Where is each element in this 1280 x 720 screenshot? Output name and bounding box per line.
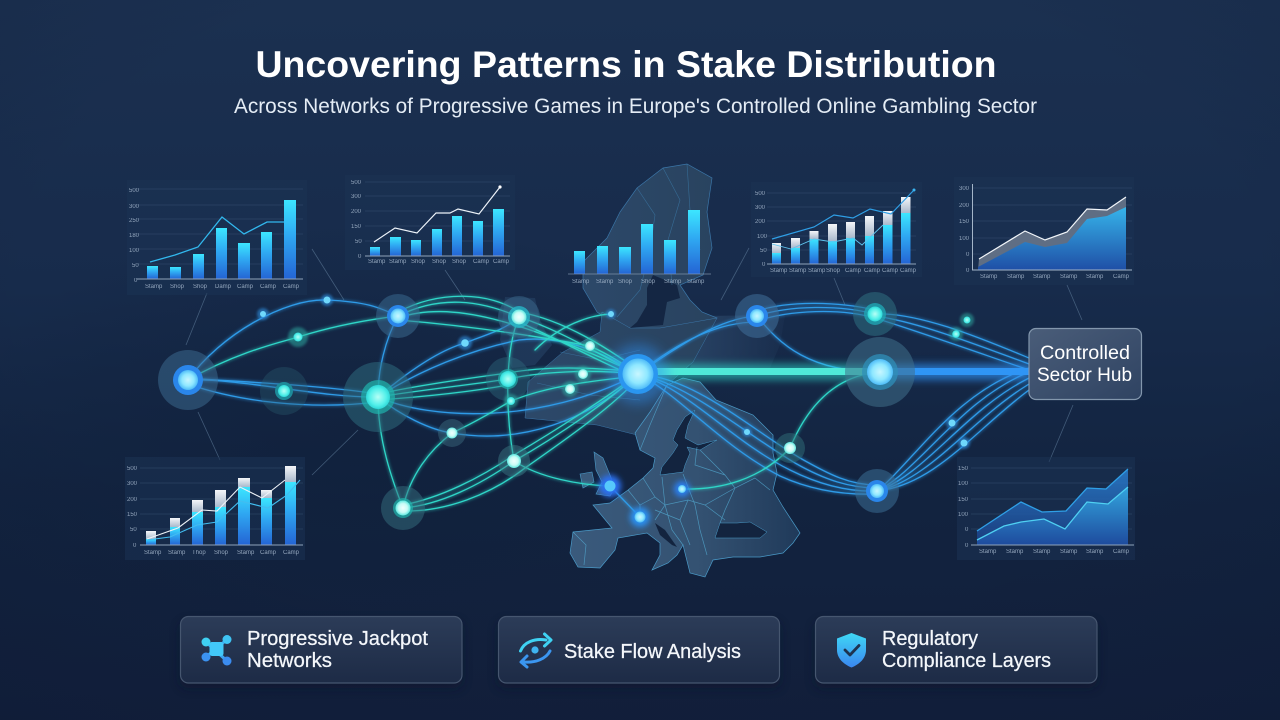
- node: lower mid: [498, 445, 530, 477]
- chart: top-centre bars with white line: Shop: [432, 259, 447, 265]
- chart: bars over map: Stamp: [687, 279, 705, 285]
- chart: top-centre bars with white line: Camp: [493, 259, 510, 265]
- chart: top-centre bars with white line: 500: [351, 180, 362, 186]
- chart: top-centre bars with white line: 0: [358, 254, 362, 260]
- node: France south glow: [630, 507, 650, 527]
- node: far left: [158, 350, 218, 410]
- chart: bottom-right area: 0: [965, 543, 969, 549]
- chart: bottom-right area: Stamp: [1033, 549, 1051, 555]
- chart: top-left bars with line: [127, 180, 307, 295]
- chart: top-left bars with line: 0: [134, 278, 138, 284]
- chart: bottom-left stacked bars: Stamp: [237, 550, 255, 556]
- node: right major: [845, 337, 915, 407]
- node: upper right teal: [853, 292, 897, 336]
- chart: top-centre bars with white line: 200: [351, 209, 362, 215]
- chart: bottom-left stacked bars: 200: [127, 497, 138, 503]
- chart: top-right area: 150: [959, 219, 970, 225]
- chart: top-centre bars with white line: 50: [355, 239, 362, 245]
- node: middle teal: [486, 357, 530, 401]
- chart: top-right stacked bars: Stamp: [808, 268, 826, 274]
- chart: top-right stacked bars: Camp: [864, 268, 881, 274]
- chart: top-right stacked bars: Camp: [900, 268, 917, 274]
- chart: bottom-right area: 100: [958, 481, 969, 487]
- card: regulatory compliance layers: Compliance Layers: [882, 650, 1051, 672]
- chart: bottom-left stacked bars: 50: [130, 527, 137, 533]
- card: regulatory compliance layers: [815, 616, 1097, 688]
- chart: top-right area: Stamp: [1060, 274, 1078, 280]
- controlled sector hub box: Controlled: [1040, 343, 1130, 364]
- chart: bottom-left stacked bars: 300: [127, 481, 138, 487]
- chart: top-right area: 100: [959, 236, 970, 242]
- chart: bottom-right area: Stamp: [979, 549, 997, 555]
- chart: top-centre bars with white line: Shop: [452, 259, 467, 265]
- chart: bottom-right area: Stamp: [1060, 549, 1078, 555]
- chart: bottom-right area: Stamp: [1006, 549, 1024, 555]
- chart: top-left bars with line: Stamp: [145, 284, 163, 290]
- chart: top-right stacked bars: Shop: [826, 268, 841, 274]
- node: central hub: [608, 344, 668, 404]
- chart: bottom-right area: 150: [958, 497, 969, 503]
- chart: top-right stacked bars: 500: [755, 191, 766, 197]
- chart: top-left bars with line: 500: [129, 188, 140, 194]
- map: continental Europe: [570, 378, 800, 577]
- chart: top-right stacked bars: [751, 182, 922, 277]
- chart: top-centre bars with white line: [345, 175, 515, 270]
- chart: top-right area: Stamp: [1033, 274, 1051, 280]
- node: bottom-left: [381, 486, 425, 530]
- chart: top-right area: [954, 177, 1134, 285]
- node: upper-left: [376, 294, 420, 338]
- node: left teal small: [260, 367, 308, 415]
- node: France west glow: [599, 475, 621, 497]
- chart: top-right stacked bars: Stamp: [789, 268, 807, 274]
- chart: bars over map: Stamp: [664, 279, 682, 285]
- title: Uncovering Patterns in Stake Distribution: [256, 44, 996, 85]
- chart: bottom-right area: 150: [958, 466, 969, 472]
- chart: top-left bars with line: 100: [129, 248, 140, 254]
- map: Ireland: [580, 472, 594, 488]
- node: mid lower: [438, 419, 466, 447]
- map of Europe: [500, 164, 800, 577]
- icon: stake flow arrows and eye: [520, 634, 551, 667]
- chart: bottom-left stacked bars: Camp: [260, 550, 277, 556]
- controlled sector hub box: Sector Hub: [1037, 365, 1132, 386]
- node: upper-mid: [498, 296, 540, 338]
- chart: top-right area: 0: [966, 268, 970, 274]
- chart: bottom-left stacked bars: Stamp: [144, 550, 162, 556]
- chart: bars over map: Shop: [641, 279, 656, 285]
- small network nodes: [257, 294, 974, 449]
- controlled sector hub box: [1029, 328, 1142, 400]
- chart: top-left bars with line: 180: [129, 233, 140, 239]
- chart: bottom-left stacked bars: 150: [127, 512, 138, 518]
- chart: top-right stacked bars: 100: [757, 234, 768, 240]
- card: progressive jackpot networks: [180, 616, 462, 688]
- chart: top-centre bars with white line: Stamp: [389, 259, 407, 265]
- central beam to hub: [638, 364, 1030, 380]
- map: upper Baltic sea: [630, 275, 680, 328]
- subtitle: Across Networks of Progressive Games in Europe's Controlled Online Gambling Sector: [234, 95, 1037, 118]
- chart: top-right area: Stamp: [1086, 274, 1104, 280]
- chart: bottom-left stacked bars: 0: [133, 543, 137, 549]
- chart: top-centre bars with white line: Shop: [411, 259, 426, 265]
- connector lines: [186, 248, 1082, 475]
- card: regulatory compliance layers: Regulatory: [882, 628, 978, 650]
- icon: network: [202, 635, 232, 666]
- chart: top-centre bars with white line: Camp: [473, 259, 490, 265]
- chart: top-centre bars with white line: 150: [351, 224, 362, 230]
- chart: top-left bars with line: Camp: [283, 284, 300, 290]
- chart: top-right area: 300: [959, 186, 970, 192]
- node: lower right teal: [775, 433, 805, 463]
- node: Poland glow: [674, 481, 690, 497]
- chart: bottom-right area: Stamp: [1086, 549, 1104, 555]
- chart: top-right stacked bars: 300: [755, 205, 766, 211]
- chart: bars over map: Stamp: [572, 279, 590, 285]
- node: lower right blue: [855, 469, 899, 513]
- chart: top-right stacked bars: 0: [762, 262, 766, 268]
- chart: bars over map: Shop: [618, 279, 633, 285]
- large network nodes: [158, 292, 915, 530]
- map: Black Sea: [715, 522, 767, 538]
- chart: top-centre bars with white line: Stamp: [368, 259, 386, 265]
- chart: top-left bars with line: 50: [132, 263, 139, 269]
- chart: bars over map: [568, 210, 711, 285]
- chart: top-right stacked bars: 200: [755, 219, 766, 225]
- chart: bottom-left stacked bars: Thop: [192, 550, 206, 556]
- chart: top-left bars with line: Shop: [193, 284, 208, 290]
- node: centre-left major: [343, 362, 413, 432]
- chart: bottom-right area: 100: [958, 512, 969, 518]
- chart: bars over map: Stamp: [596, 279, 614, 285]
- chart: top-right area: Camp: [1113, 274, 1130, 280]
- chart: top-right area: Stamp: [980, 274, 998, 280]
- chart: top-right area: Stamp: [1007, 274, 1025, 280]
- map: Baltic Sea: [660, 410, 717, 475]
- chart: top-right stacked bars: 50: [760, 248, 767, 254]
- chart: bottom-left stacked bars: Camp: [283, 550, 300, 556]
- chart: top-right area: 0: [966, 252, 970, 258]
- chart: top-left bars with line: Damp: [215, 284, 232, 290]
- chart: top-right stacked bars: Stamp: [770, 268, 788, 274]
- chart: top-left bars with line: Camp: [260, 284, 277, 290]
- card: stake flow analysis: Stake Flow Analysis: [564, 641, 741, 663]
- chart: top-left bars with line: Shop: [170, 284, 185, 290]
- chart: bottom-left stacked bars: Shop: [214, 550, 229, 556]
- chart: top-right stacked bars: Camp: [882, 268, 899, 274]
- chart: top-right stacked bars: Camp: [845, 268, 862, 274]
- map: Adriatic and Mediterranean: [655, 523, 677, 547]
- chart: bottom-right area: [957, 457, 1135, 560]
- chart: bottom-left stacked bars: Stamp: [168, 550, 186, 556]
- network links: [188, 296, 1029, 517]
- chart: top-left bars with line: 300: [129, 204, 140, 210]
- chart: bottom-left stacked bars: 500: [127, 466, 138, 472]
- chart: bottom-right area: Camp: [1113, 549, 1130, 555]
- card: stake flow analysis: [498, 616, 780, 688]
- map: central Europe upper layer: [525, 312, 717, 435]
- chart: bottom-right area: 0: [965, 527, 969, 533]
- chart: top-centre bars with white line: 300: [351, 194, 362, 200]
- chart: top-left bars with line: Camp: [237, 284, 254, 290]
- map: British Isles upper layer: [500, 297, 552, 368]
- node: upper right blue: [735, 294, 779, 338]
- chart: top-left bars with line: 250: [129, 218, 140, 224]
- card: progressive jackpot networks: Progressive Jackpot: [247, 628, 428, 650]
- card: progressive jackpot networks: Networks: [247, 650, 332, 672]
- map: Scandinavia upper layer: [583, 164, 717, 330]
- icon: shield with check: [837, 633, 866, 668]
- map: upper faint eastern land: [690, 315, 785, 368]
- map: Great Britain: [594, 452, 615, 496]
- chart: bottom-left stacked bars: [125, 457, 305, 560]
- chart: top-right area: 200: [959, 203, 970, 209]
